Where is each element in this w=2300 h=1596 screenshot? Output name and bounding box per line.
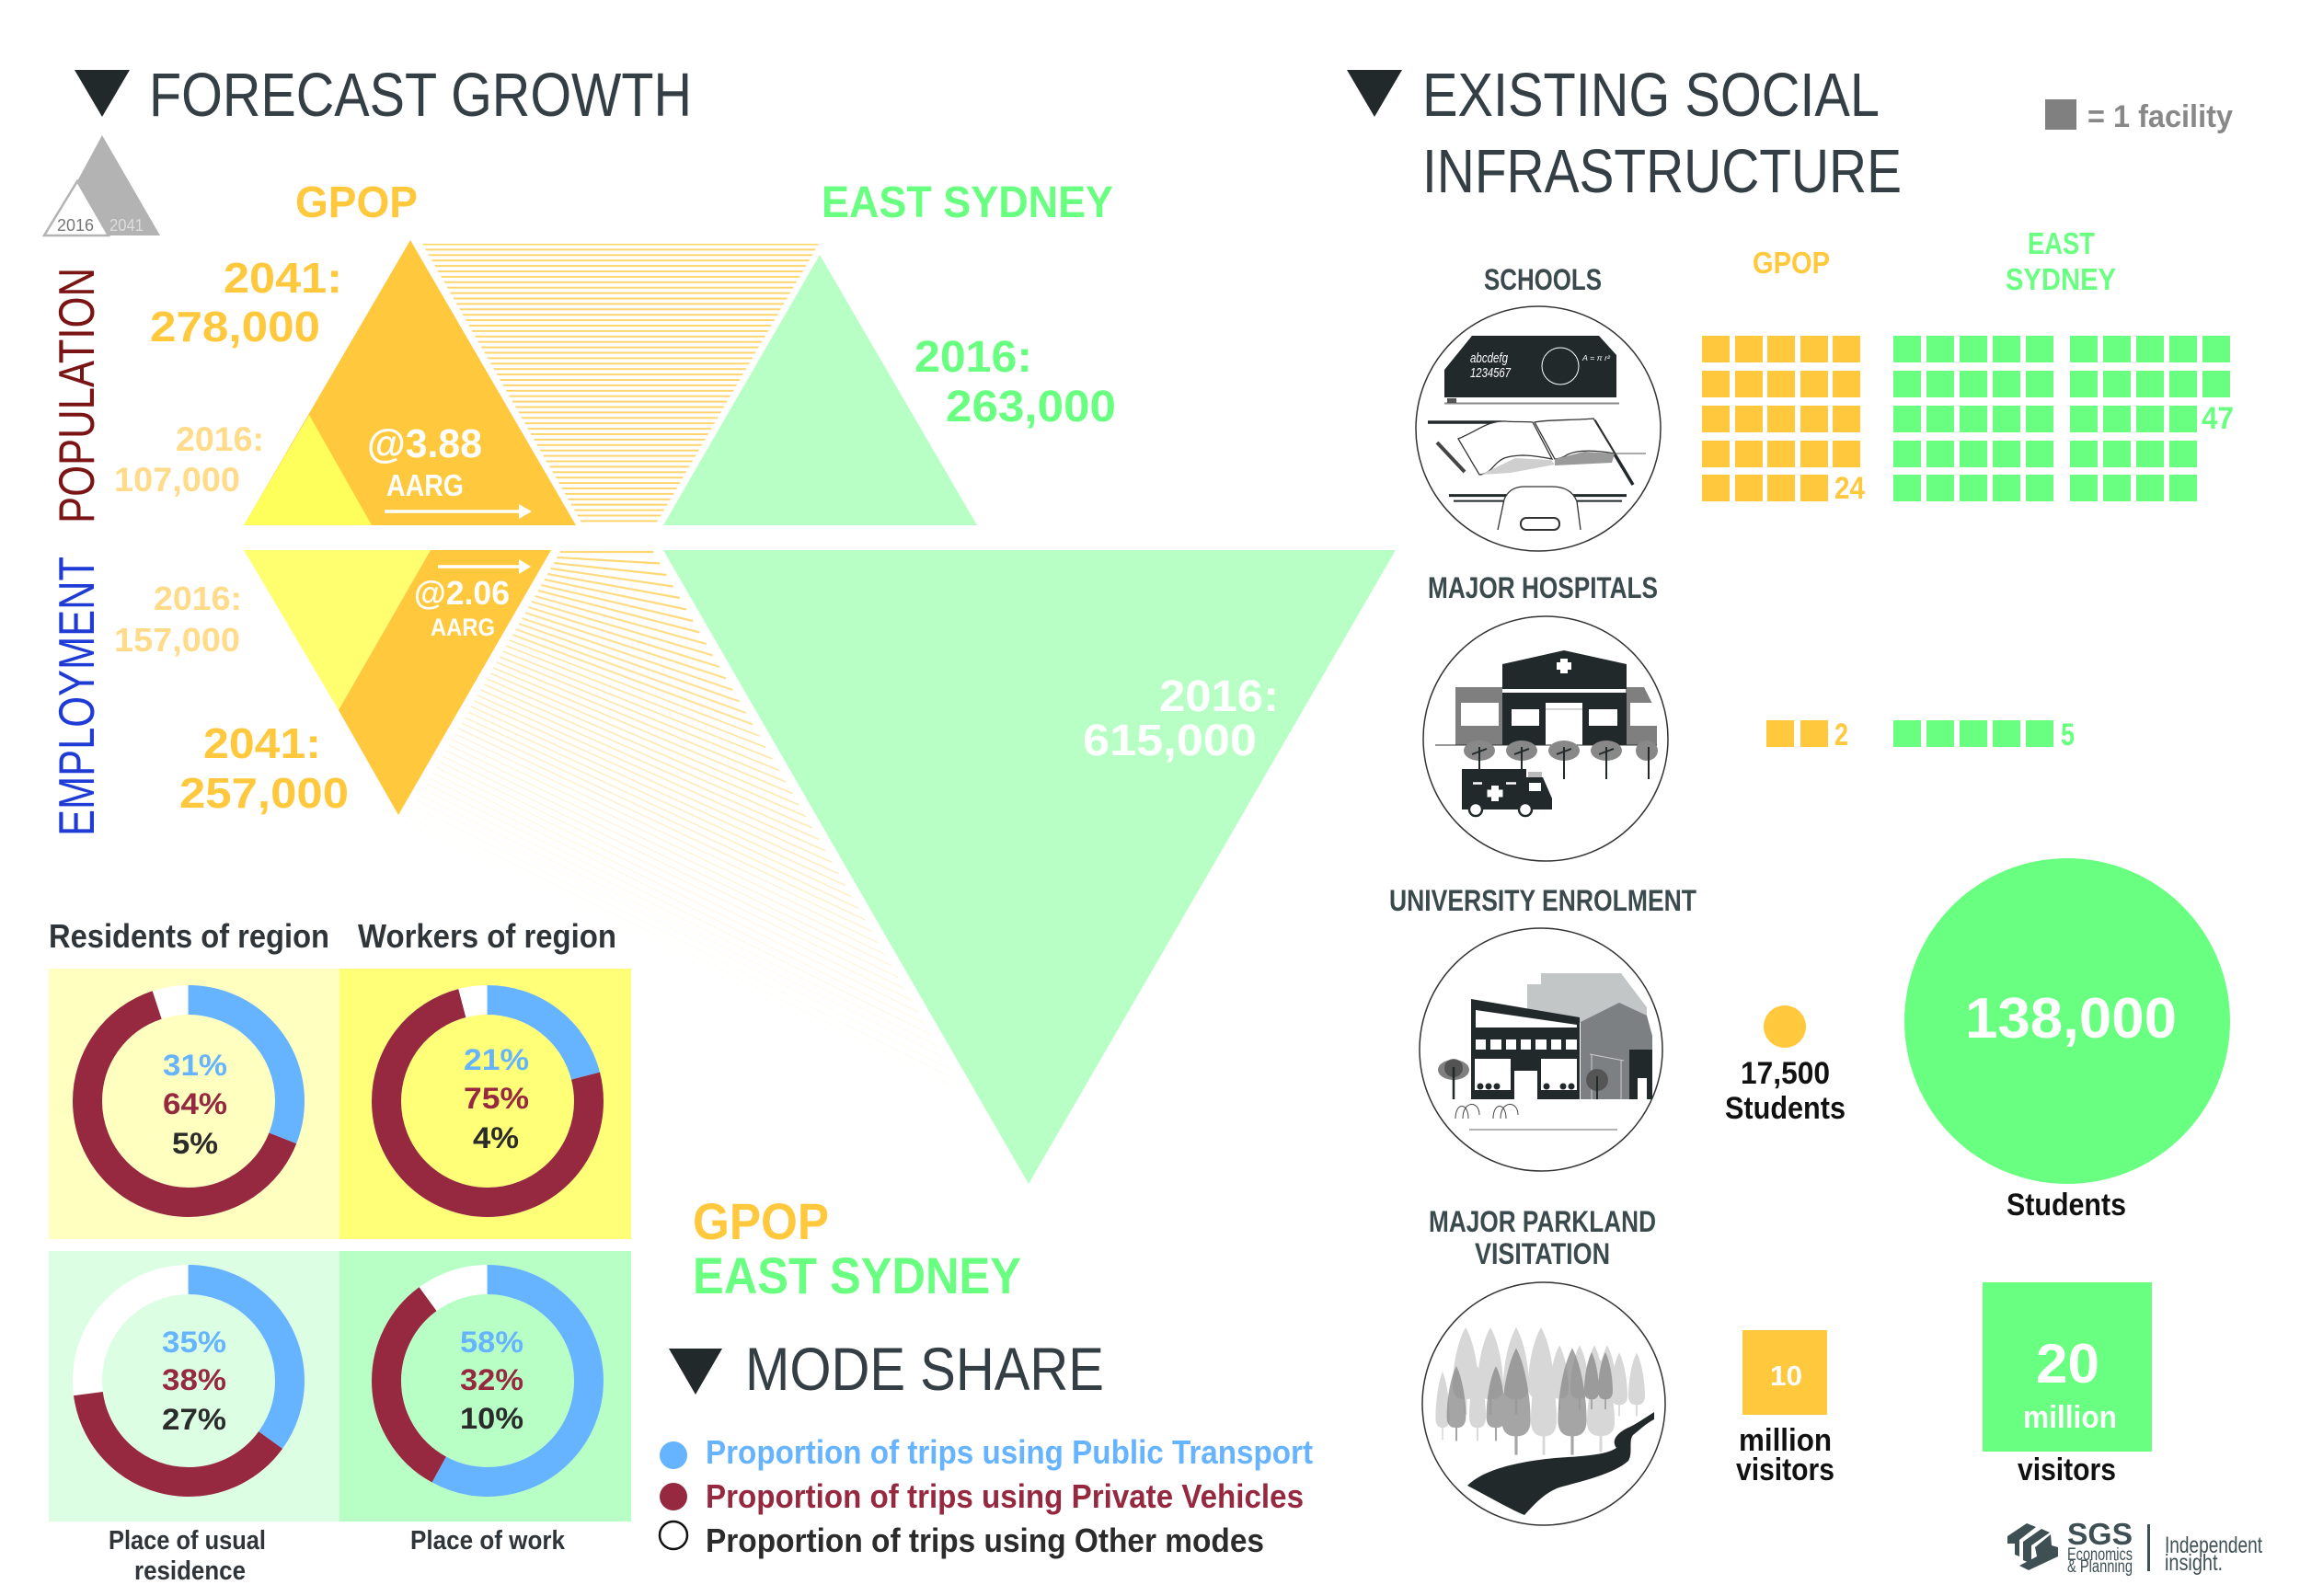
pictogram: East Sydney hospitals 5: 5 bbox=[2061, 718, 2075, 752]
label: East Sydney population 2016 bbox=[914, 333, 1116, 431]
legend: triangle years bbox=[44, 135, 160, 235]
triangle: GPOP population: AARG bbox=[386, 468, 464, 502]
logo: SGS Economics and Planning: insight. bbox=[2165, 1550, 2223, 1576]
donut panel: GPOP residents bbox=[49, 969, 339, 1239]
section: mode share donuts bbox=[49, 917, 631, 1586]
icon: parkland bbox=[1422, 1282, 1665, 1525]
legend item: private vehicles: Proportion of trips using Private Vehicles bbox=[706, 1477, 1304, 1515]
donut panel: GPOP residents: 5% bbox=[172, 1127, 218, 1160]
label: East Sydney population 2016: 2016: bbox=[914, 333, 1032, 382]
pictogram: East Sydney schools 47 bbox=[1893, 336, 2234, 501]
label: GPOP population 2041: 278,000 bbox=[150, 303, 320, 350]
donut panel: GPOP residents: 31% bbox=[163, 1049, 227, 1082]
caption: place of usual residence: residence bbox=[134, 1556, 246, 1586]
donut panel: East Sydney workers: 10% bbox=[460, 1402, 523, 1435]
triangle: East Sydney employment: 2016: bbox=[1159, 672, 1279, 721]
block: East Sydney visitors bbox=[1983, 1282, 2152, 1487]
donut panel: East Sydney residents bbox=[49, 1251, 339, 1521]
pictogram: GPOP schools 24: 24 bbox=[1834, 471, 1865, 506]
block: East Sydney visitors: million bbox=[2023, 1400, 2117, 1435]
pictogram: GPOP hospitals 2 bbox=[1766, 718, 1848, 752]
heading: major parkland visitation: VISITATION bbox=[1475, 1237, 1610, 1270]
label: GPOP employment 2016: 157,000 bbox=[114, 621, 240, 659]
label: GPOP employment 2016: 2016: bbox=[154, 580, 242, 617]
icon: schools: abcdefg bbox=[1470, 351, 1508, 366]
bubble: East Sydney students: 138,000 bbox=[1965, 987, 2177, 1051]
legend: triangle years: 2041 bbox=[109, 216, 144, 235]
caption: place of usual residence bbox=[109, 1526, 266, 1586]
donut panel: East Sydney residents: 27% bbox=[162, 1403, 226, 1436]
pictogram: GPOP schools 24 bbox=[1702, 336, 1865, 506]
pictogram: East Sydney hospitals 5 bbox=[1893, 718, 2075, 752]
hatch: employment link bbox=[401, 552, 984, 1127]
legend item: other modes: Proportion of trips using Other modes bbox=[706, 1521, 1264, 1559]
bubble: East Sydney students: Students bbox=[2007, 1188, 2126, 1223]
heading: university enrolment: UNIVERSITY ENROLMENT bbox=[1389, 884, 1696, 917]
triangle: GPOP population bbox=[244, 240, 576, 525]
donut panel: East Sydney workers: 58% bbox=[460, 1326, 523, 1359]
logo: SGS Economics and Planning: & Planning bbox=[2067, 1557, 2133, 1577]
donut panel: GPOP workers bbox=[339, 969, 631, 1239]
donut panel: East Sydney workers: 32% bbox=[460, 1363, 523, 1396]
heading: major parkland visitation bbox=[1429, 1205, 1656, 1270]
section: forecast growth bbox=[44, 61, 1396, 1184]
icon: heading triangle bbox=[75, 70, 130, 117]
donut panel: GPOP workers: 4% bbox=[473, 1121, 519, 1154]
heading: existing social infrastructure: EXISTING SOCIAL bbox=[1422, 61, 1880, 130]
label: employment axis: EMPLOYMENT bbox=[48, 557, 105, 836]
donut panel: East Sydney residents: 35% bbox=[162, 1326, 226, 1359]
pictogram: GPOP hospitals 2: 2 bbox=[1834, 718, 1848, 752]
icon: heading triangle bbox=[669, 1349, 722, 1395]
heading: existing social infrastructure: INFRASTRUCTURE bbox=[1422, 137, 1902, 206]
triangle: GPOP employment bbox=[244, 550, 551, 815]
heading: major hospitals: MAJOR HOSPITALS bbox=[1428, 571, 1658, 604]
triangle: East Sydney employment bbox=[663, 550, 1396, 1184]
section: existing social infrastructure bbox=[1347, 61, 2234, 1525]
label: GPOP population 2041: 2041: bbox=[224, 254, 342, 302]
pictogram: East Sydney schools 47: 47 bbox=[2202, 401, 2234, 436]
icon: schools: A = π r² bbox=[1581, 354, 1610, 362]
column heading: GPOP: GPOP bbox=[1753, 246, 1830, 280]
block: East Sydney visitors: visitors bbox=[2018, 1452, 2116, 1487]
label: GPOP employment 2041 bbox=[179, 719, 349, 817]
block: East Sydney visitors: 20 bbox=[2036, 1333, 2099, 1395]
logo: SGS Economics and Planning bbox=[2007, 1517, 2262, 1577]
icon: schools bbox=[1416, 306, 1661, 551]
heading: residents of region: Residents of region bbox=[49, 917, 329, 955]
label: GPOP population 2016 bbox=[114, 420, 264, 499]
block: GPOP visitors bbox=[1736, 1330, 1834, 1487]
caption: place of work: Place of work bbox=[410, 1526, 566, 1556]
block: GPOP visitors: 10 bbox=[1770, 1360, 1802, 1392]
heading: workers of region: Workers of region bbox=[358, 917, 616, 955]
legend: triangle years: 2016 bbox=[57, 216, 94, 235]
bubble: East Sydney students bbox=[1904, 858, 2230, 1223]
donut panel: GPOP workers: 21% bbox=[464, 1043, 529, 1076]
icon: university bbox=[1420, 928, 1662, 1171]
legend: region colours: EAST SYDNEY bbox=[693, 1246, 1021, 1304]
bubble: GPOP students: 17,500 bbox=[1741, 1056, 1830, 1091]
column heading: East Sydney: SYDNEY bbox=[2006, 262, 2116, 296]
section: mode share legend bbox=[660, 1335, 1313, 1559]
logo: SGS Economics and Planning: Independent bbox=[2165, 1533, 2262, 1558]
bubble: GPOP students bbox=[1725, 1005, 1846, 1126]
icon: heading triangle bbox=[1347, 70, 1402, 117]
heading: existing social infrastructure bbox=[1422, 61, 1902, 206]
donut panel: East Sydney residents: 38% bbox=[162, 1363, 226, 1396]
icon: schools: 1234567 bbox=[1470, 366, 1512, 381]
heading: schools: SCHOOLS bbox=[1484, 263, 1602, 296]
block: GPOP visitors: visitors bbox=[1736, 1452, 1834, 1487]
logo: SGS Economics and Planning: SGS bbox=[2067, 1517, 2133, 1551]
column heading: East Sydney bbox=[2006, 226, 2116, 296]
triangle: East Sydney employment: 615,000 bbox=[1083, 717, 1257, 765]
label: East Sydney population 2016: 263,000 bbox=[946, 383, 1116, 431]
triangle: East Sydney population bbox=[663, 255, 977, 525]
heading: mode share: MODE SHARE bbox=[745, 1335, 1104, 1403]
triangle: GPOP population: @3.88 bbox=[367, 421, 482, 466]
label: GPOP population 2016: 2016: bbox=[176, 420, 264, 458]
label: GPOP population 2041 bbox=[150, 254, 342, 350]
label: East Sydney: EAST SYDNEY bbox=[822, 178, 1113, 227]
heading: forecast growth: FORECAST GROWTH bbox=[149, 61, 692, 130]
triangle: GPOP employment: AARG bbox=[431, 614, 495, 641]
triangle: GPOP employment: @2.06 bbox=[414, 574, 510, 612]
label: GPOP employment 2041: 257,000 bbox=[179, 769, 349, 817]
label: GPOP employment 2041: 2041: bbox=[203, 719, 321, 767]
legend: region colours bbox=[693, 1192, 1021, 1304]
label: GPOP: GPOP bbox=[295, 178, 418, 227]
bubble: GPOP students: Students bbox=[1725, 1091, 1846, 1126]
block: GPOP visitors: million bbox=[1739, 1423, 1832, 1458]
caption: place of usual residence: Place of usual bbox=[109, 1526, 266, 1556]
donut panel: GPOP workers: 75% bbox=[464, 1082, 529, 1115]
legend: one facility: = 1 facility bbox=[2087, 99, 2233, 134]
legend: region colours: GPOP bbox=[693, 1192, 829, 1250]
column heading: East Sydney: EAST bbox=[2028, 226, 2095, 260]
donut panel: GPOP residents: 64% bbox=[163, 1087, 227, 1120]
heading: major parkland visitation: MAJOR PARKLAND bbox=[1429, 1205, 1656, 1238]
hatch: population link bbox=[422, 244, 819, 522]
donut panel: East Sydney workers bbox=[339, 1251, 631, 1521]
logo: SGS Economics and Planning: Economics bbox=[2067, 1545, 2133, 1565]
label: population axis: POPULATION bbox=[48, 268, 105, 523]
label: GPOP population 2016: 107,000 bbox=[114, 461, 240, 499]
legend item: public transport: Proportion of trips using Public Transport bbox=[706, 1433, 1313, 1471]
icon: hospitals bbox=[1423, 616, 1668, 861]
label: GPOP employment 2016 bbox=[114, 580, 242, 659]
